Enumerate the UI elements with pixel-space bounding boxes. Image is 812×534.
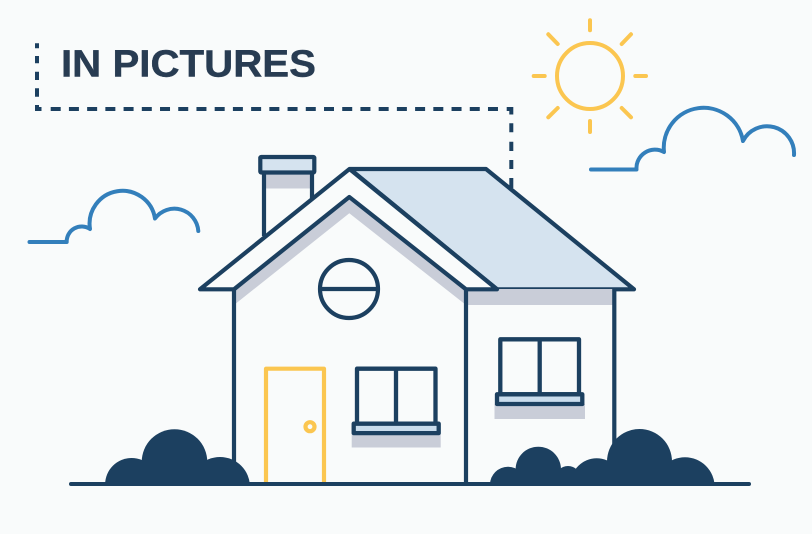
wall shadow [234,197,466,305]
walls [234,289,614,484]
chimney [260,157,314,236]
dashed line [37,43,511,188]
side wall shadow [466,289,614,305]
door [266,369,324,484]
icon: right cloud [591,108,794,170]
icon: sun [534,20,646,132]
roof panel [350,169,634,289]
round window [320,260,378,318]
ground line [71,482,749,486]
side window [494,339,585,419]
roof front [200,169,497,289]
icon: left cloud [30,191,198,242]
title: IN PICTURES [61,44,316,86]
front window [352,369,441,448]
left bushes [105,429,250,482]
right bushes [490,429,714,482]
gable wall [234,197,466,484]
house [200,157,634,484]
